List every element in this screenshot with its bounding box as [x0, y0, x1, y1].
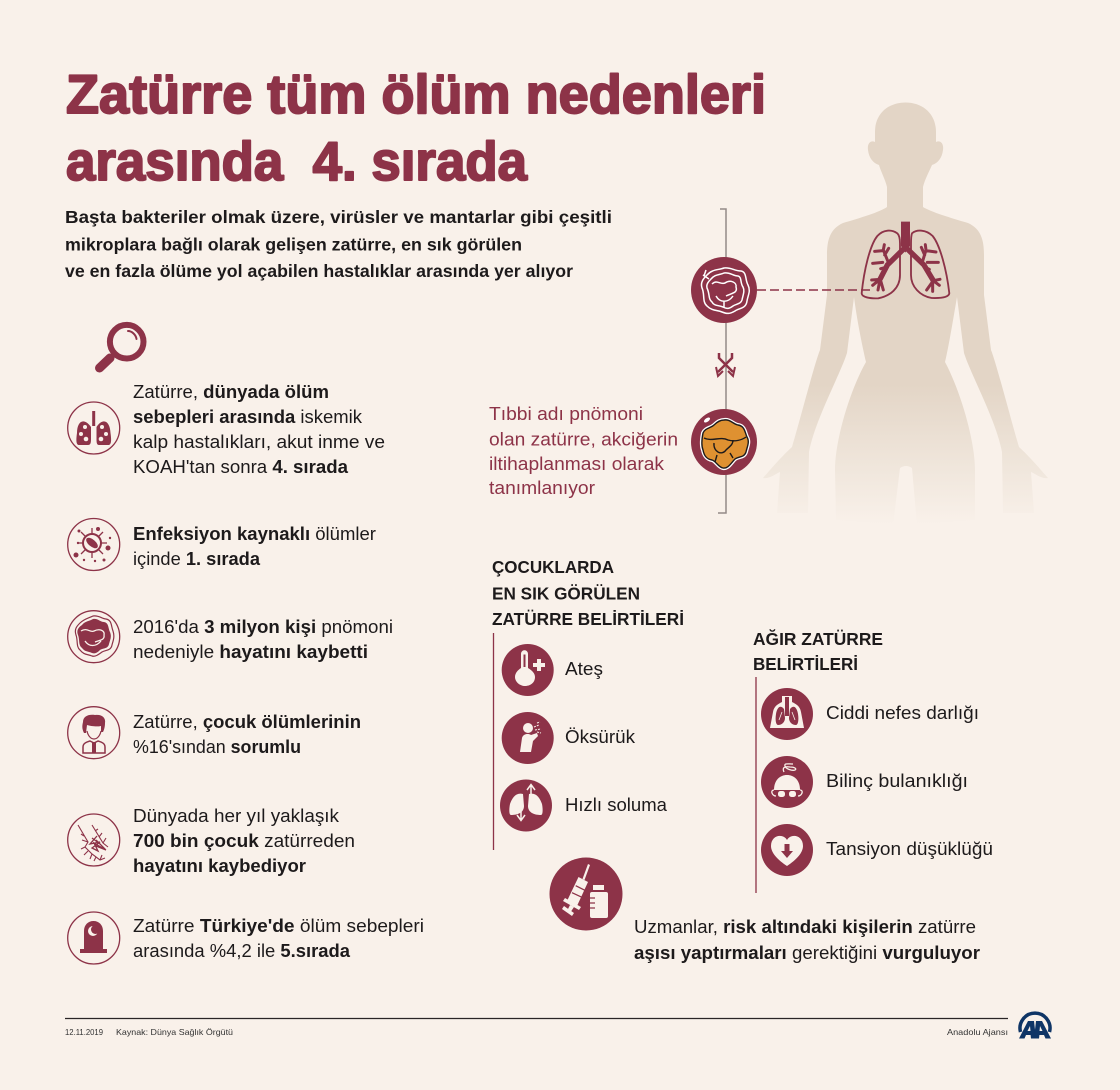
icon: inflamed alveoli — [691, 409, 757, 475]
icon: diseased lungs — [68, 402, 120, 454]
icon: healthy alveoli — [691, 257, 757, 323]
text: definition: iltihaplanması olarak — [489, 454, 665, 474]
footer date and source: Kaynak: Dünya Sağlık Örgütü — [116, 1027, 233, 1037]
item 5: 700 thousand — [68, 806, 355, 876]
icon: vaccine — [550, 858, 622, 930]
icon: chest and lungs — [761, 688, 813, 740]
item 1: ranking: Zatürre, dünyada ölüm — [133, 382, 329, 402]
logo: Anadolu Agency — [1019, 1013, 1051, 1038]
icon: thermometer — [502, 644, 554, 696]
heading: EN SIK GÖRÜLEN — [492, 584, 640, 604]
item 1: ranking: sebepleri arasında iskemik — [133, 407, 363, 427]
dashed connector — [757, 289, 872, 291]
intro text — [65, 207, 612, 281]
text: definition: tanımlanıyor — [489, 478, 595, 498]
footer rule — [65, 1018, 1008, 1020]
item 3: 2016 deaths: 2016'da 3 milyon kişi pnömoni — [133, 617, 393, 637]
item 3: 2016 deaths: nedeniyle hayatını kaybetti — [133, 642, 368, 662]
intro text: ve en fazla ölüme yol açabilen hastalıklar arasında yer alıyor — [65, 261, 573, 281]
lungs — [862, 222, 949, 298]
icon: coughing person — [502, 712, 554, 764]
icon: rapid breathing lungs — [500, 780, 552, 832]
icon: down crossing arrows — [716, 353, 735, 376]
panel: severe symptoms: Bilinç bulanıklığı — [826, 771, 968, 791]
text: definition — [489, 404, 678, 498]
icon: heart down arrow — [761, 824, 813, 876]
panel: children's symptoms — [492, 557, 684, 850]
body silhouette — [763, 102, 1048, 525]
icon: child — [68, 707, 120, 759]
text: expert advice: Uzmanlar, risk altındaki kişilerin zatürre — [634, 917, 976, 937]
heading: BELİRTİLERİ — [753, 654, 858, 674]
heading: AĞIR ZATÜRRE — [753, 628, 883, 649]
item 2: infectious deaths: içinde 1. sırada — [133, 549, 261, 569]
item 2: infectious deaths — [68, 518, 376, 570]
item 4: child deaths: %16'sından sorumlu — [133, 737, 301, 757]
text: definition: olan zatürre, akciğerin — [489, 430, 678, 450]
intro text: Başta bakteriler olmak üzere, virüsler ve mantarlar gibi çeşitli — [65, 207, 612, 227]
footer agency: Anadolu Ajansı — [947, 1027, 1008, 1037]
item 6: Turkey: arasında %4,2 ile 5.sırada — [133, 941, 351, 961]
panel: severe symptoms: Tansiyon düşüklüğü — [826, 839, 993, 859]
item 6: Turkey: Zatürre Türkiye'de ölüm sebepleri — [133, 916, 424, 936]
item 2: infectious deaths: Enfeksiyon kaynaklı ölümler — [133, 524, 376, 544]
panel: children's symptoms: Öksürük — [565, 727, 636, 747]
panel: children's symptoms: Hızlı soluma — [565, 795, 668, 815]
item 6: Turkey — [68, 912, 424, 964]
icon: magnifier — [100, 325, 144, 368]
text: expert advice: aşısı yaptırmaları gerektiğini vurguluyor — [634, 943, 980, 963]
item 1: ranking — [68, 382, 385, 477]
panel: severe symptoms — [753, 628, 993, 893]
title: Zatürre tüm ölüm nedenleri — [66, 63, 766, 125]
footer date and source — [65, 1027, 233, 1037]
panel: severe symptoms: Ciddi nefes darlığı — [826, 703, 979, 723]
heading — [753, 628, 883, 674]
item 5: 700 thousand: Dünyada her yıl yaklaşık — [133, 806, 340, 826]
item 4: child deaths — [68, 707, 361, 759]
item 3: 2016 deaths — [68, 611, 393, 663]
vertical connector line — [718, 209, 726, 513]
footer date and source: 12.11.2019 — [65, 1027, 103, 1037]
item 5: 700 thousand: 700 bin çocuk zatürreden — [133, 831, 355, 851]
icon: alveoli — [68, 611, 120, 663]
item 1: ranking: KOAH'tan sonra 4. sırada — [133, 457, 349, 477]
text: expert advice — [634, 917, 980, 963]
intro text: mikroplara bağlı olarak gelişen zatürre, en sık görülen — [65, 234, 522, 254]
item 1: ranking: kalp hastalıkları, akut inme ve — [133, 432, 385, 452]
icon: bronchial tree — [68, 814, 120, 866]
title — [66, 63, 766, 192]
text: definition: Tıbbi adı pnömoni — [489, 404, 643, 424]
heading: ÇOCUKLARDA — [492, 557, 614, 577]
panel: children's symptoms: Ateş — [565, 659, 603, 679]
icon: dizzy head — [761, 756, 813, 808]
heading — [492, 557, 684, 629]
icon: virus — [68, 518, 120, 570]
icon: gravestone — [68, 912, 120, 964]
heading: ZATÜRRE BELİRTİLERİ — [492, 609, 684, 629]
item 5: 700 thousand: hayatını kaybediyor — [133, 856, 306, 876]
item 4: child deaths: Zatürre, çocuk ölümlerinin — [133, 712, 361, 732]
title: arasında 4. sırada — [66, 130, 527, 192]
